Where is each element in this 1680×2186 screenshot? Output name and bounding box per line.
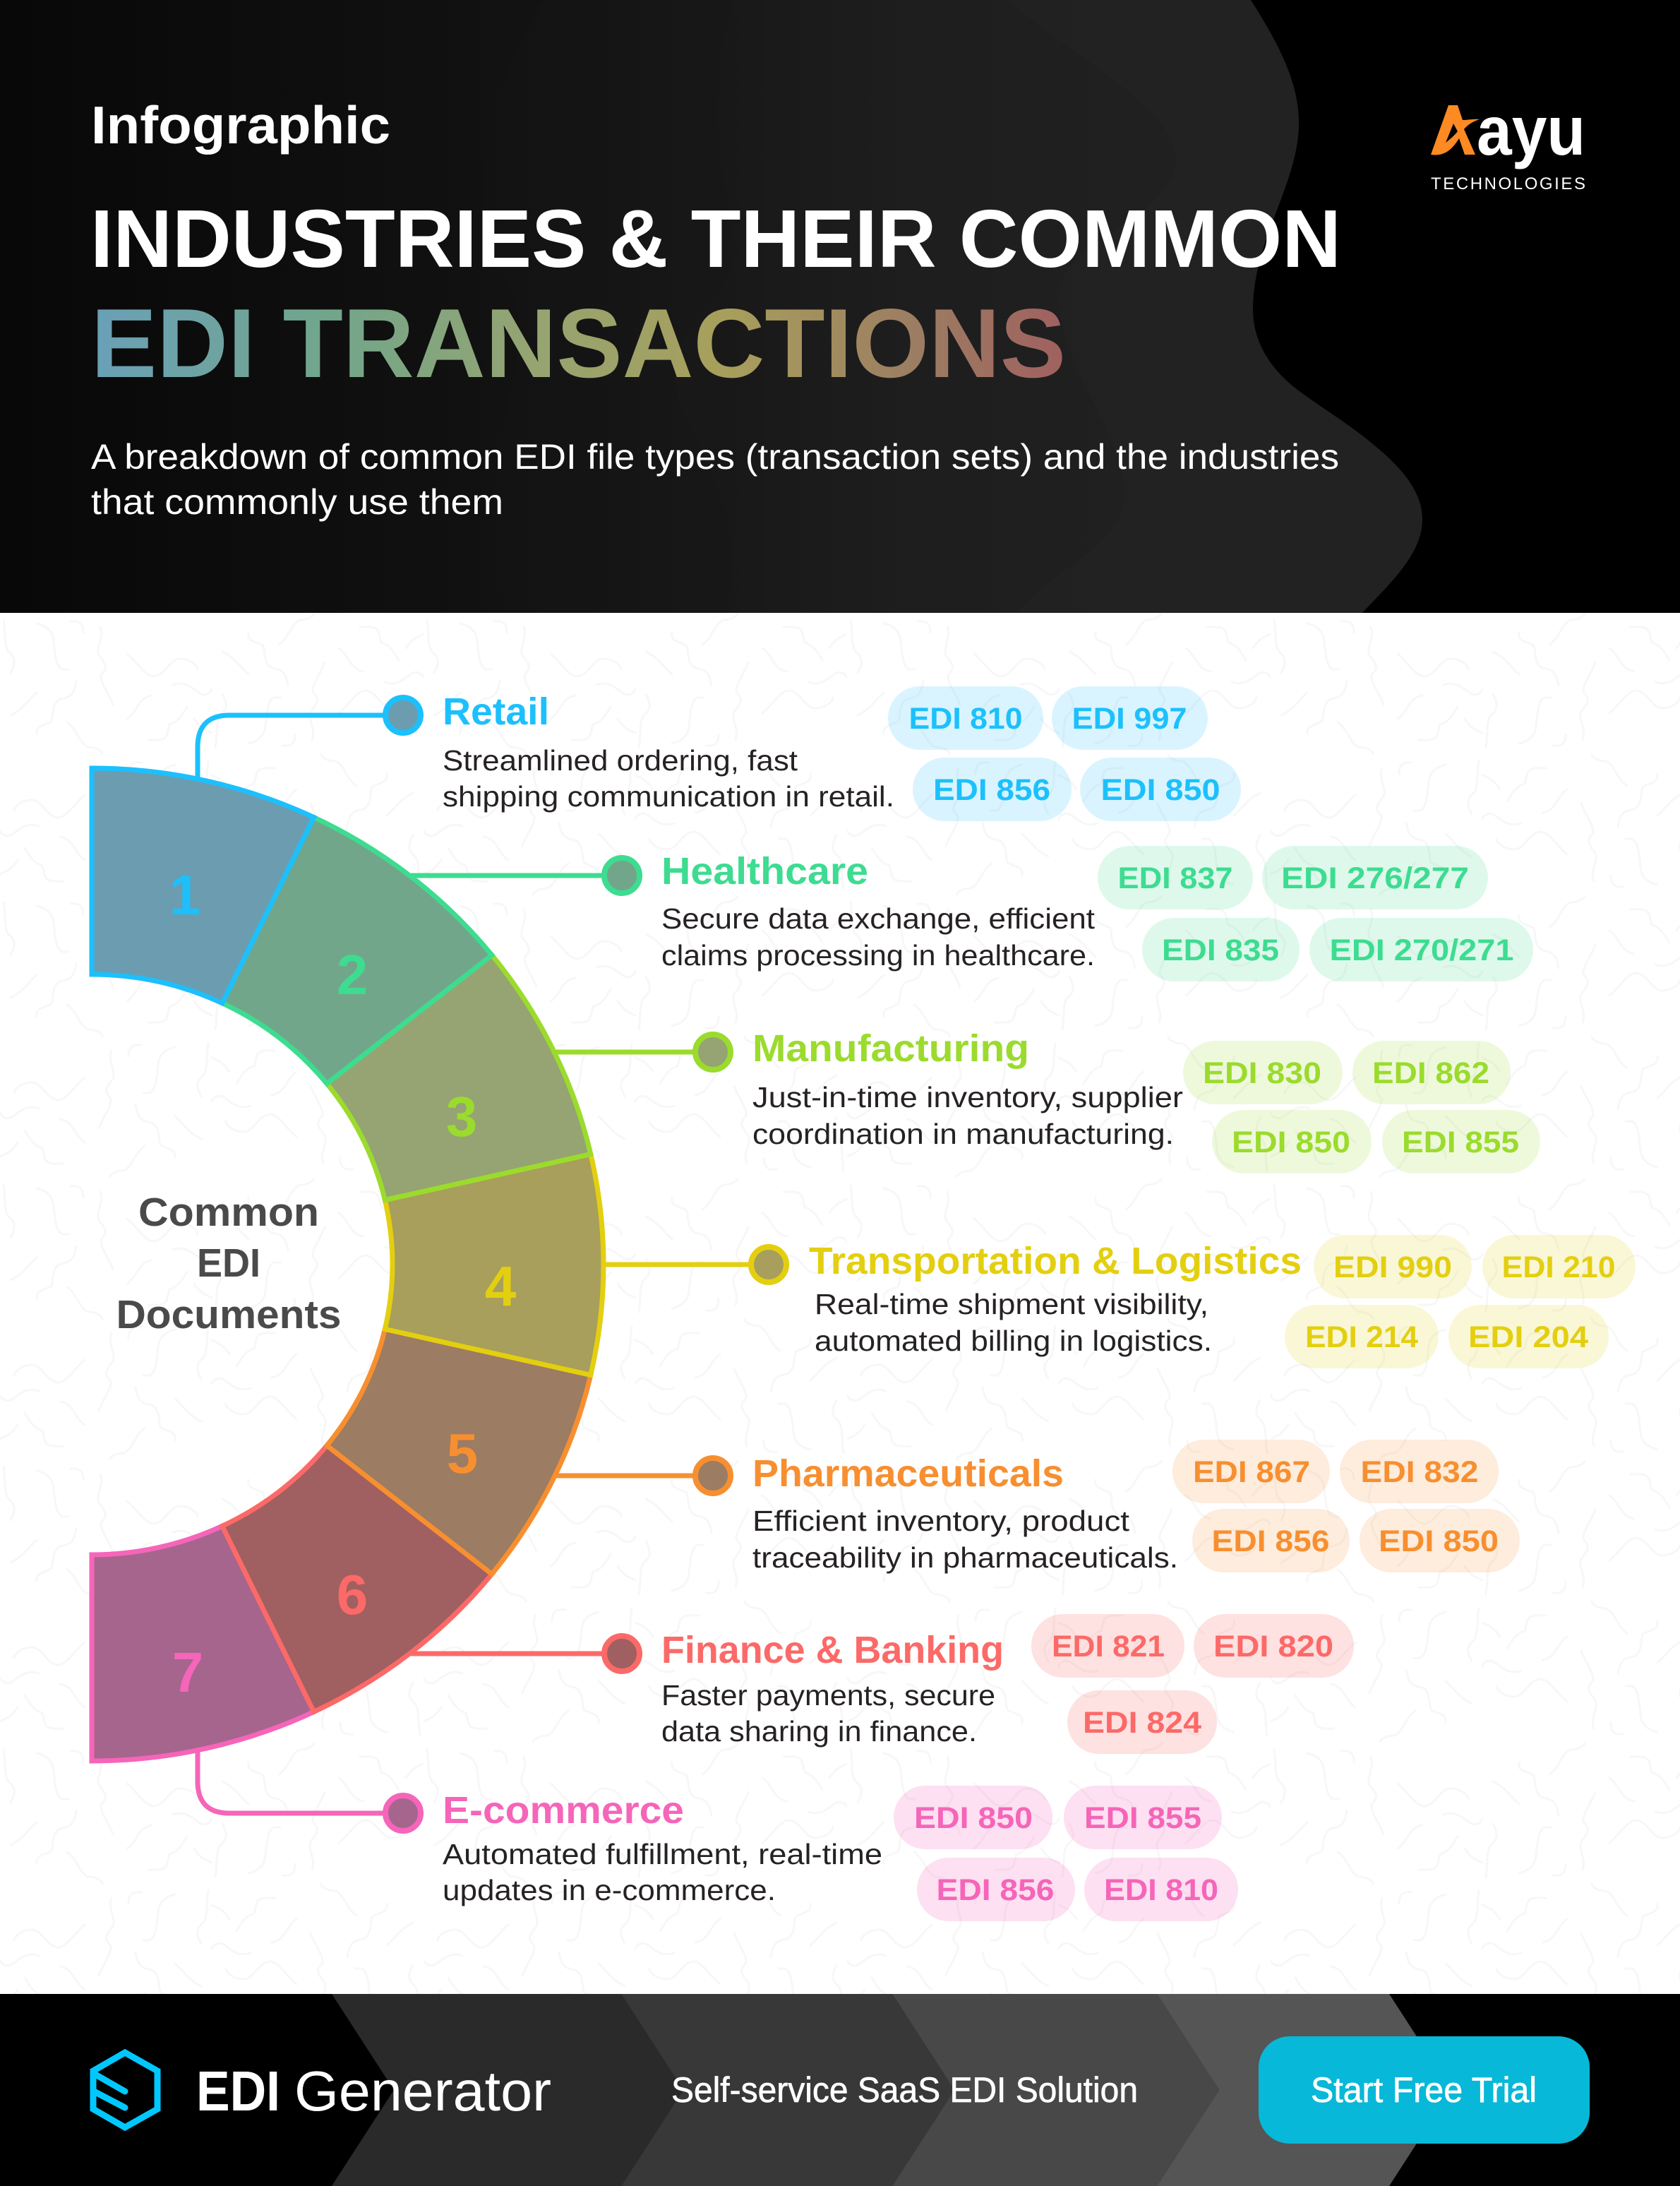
button: Start Free Trial: Start Free Trial [1311,2070,1537,2110]
heading: Manufacturing: Manufacturing [752,1027,1029,1070]
center label: Documents [116,1292,342,1337]
dot: Retail [385,698,421,733]
pills: Finance & Banking: EDI 824 [1083,1706,1201,1740]
pills: Pharmaceuticals: EDI 832 [1361,1455,1478,1489]
pills: Transportation & Logistics: EDI 214 [1305,1320,1418,1354]
button: Start Free Trial [1259,2036,1590,2144]
pills: Pharmaceuticals: EDI 856 [1211,1524,1330,1558]
heading: E-commerce: E-commerce [443,1789,684,1832]
row: E-commerce [385,1786,1238,1921]
segment numbers: 1 [169,864,200,926]
pills: Retail: EDI 997 [1072,702,1187,736]
description: Manufacturing [752,1081,1183,1150]
description: E-commerce [443,1838,882,1906]
segment numbers: 2 [337,943,368,1006]
pills: Transportation & Logistics: EDI 204 [1468,1320,1588,1354]
description: Healthcare [661,902,1096,972]
pills: Retail: EDI 850 [1101,773,1220,807]
pills: E-commerce [894,1786,1238,1921]
pills: Healthcare: EDI 837 [1118,861,1232,895]
pills: Finance & Banking [1031,1614,1354,1754]
footer band [0,1994,1680,2186]
tagline: Self-service SaaS EDI Solution [671,2070,1138,2110]
row: Healthcare [604,846,1533,981]
pills: Finance & Banking: EDI 820 [1213,1630,1333,1664]
segment 2 [222,818,492,1084]
description: Retail: shipping communication in retail. [443,780,894,813]
row: Finance & Banking [604,1614,1354,1754]
pills: Retail: EDI 810 [909,702,1022,736]
description: Healthcare: claims processing in healthcare. [661,939,1095,972]
description: Pharmaceuticals: traceability in pharmaceuticals. [752,1541,1178,1574]
row: Pharmaceuticals [695,1440,1520,1574]
description: Transportation & Logistics [815,1288,1212,1357]
brand: EDI Generator: Generator [294,2060,551,2122]
pills: Pharmaceuticals: EDI 850 [1379,1524,1499,1558]
pills: Transportation & Logistics: EDI 990 [1333,1250,1452,1284]
pills: Manufacturing: EDI 830 [1203,1056,1321,1090]
heading: Finance & Banking: Finance & Banking [661,1629,1004,1671]
dot: Manufacturing [695,1034,731,1070]
heading: Retail: Retail [443,691,549,733]
description: Finance & Banking: Faster payments, secure [661,1679,995,1712]
segment numbers: 7 [172,1641,203,1704]
segment numbers: 4 [485,1255,517,1318]
pills: Finance & Banking: EDI 821 [1052,1630,1165,1664]
description: E-commerce: Automated fulfillment, real-time [443,1838,882,1870]
pills: Manufacturing [1183,1041,1540,1173]
description: Retail: Streamlined ordering, fast [443,744,798,777]
center label: EDI [197,1241,260,1286]
segment numbers: 3 [446,1085,477,1148]
segment numbers: 6 [337,1563,368,1626]
center label: Common [138,1190,319,1235]
pills: Manufacturing: EDI 862 [1372,1056,1489,1090]
segment numbers: 5 [447,1422,478,1485]
connectors [198,715,769,1813]
dot: Finance & Banking [604,1636,640,1671]
pills: Manufacturing: EDI 850 [1232,1125,1350,1159]
pills: E-commerce: EDI 810 [1104,1873,1218,1907]
pills: E-commerce: EDI 850 [914,1801,1033,1835]
dot: Transportation & Logistics [751,1247,786,1282]
pills: Healthcare: EDI 276/277 [1281,861,1469,895]
pills: Retail [888,686,1241,821]
subtitle: that commonly use them [91,482,503,522]
description: Transportation & Logistics: automated billing in logistics. [815,1325,1212,1357]
segment 6 [222,1445,492,1712]
heading: Transportation & Logistics: Transportation & Logistics [809,1240,1302,1282]
description: Manufacturing: coordination in manufacturing. [752,1118,1174,1150]
center label [116,1190,342,1337]
subtitle: A breakdown of common EDI file types (transaction sets) and the industries [91,437,1339,477]
heading: Pharmaceuticals: Pharmaceuticals [752,1452,1064,1495]
row: Manufacturing [695,1027,1540,1173]
pills: E-commerce: EDI 856 [936,1873,1055,1907]
dot: Healthcare [604,858,640,893]
pills: Retail: EDI 856 [933,773,1050,807]
heading: Healthcare: Healthcare [661,850,868,892]
pills: Transportation & Logistics [1285,1235,1636,1368]
description: Transportation & Logistics: Real-time shipment visibility, [815,1288,1208,1320]
pills: Pharmaceuticals: EDI 867 [1193,1455,1310,1489]
description: Finance & Banking: data sharing in finance. [661,1715,977,1748]
segment 3 [327,955,591,1200]
patterned white background [0,613,1680,1994]
segment 1 [92,768,314,1003]
title line 1: INDUSTRIES & THEIR COMMON [90,193,1341,285]
description: E-commerce: updates in e-commerce. [443,1874,776,1906]
segment 5 [327,1329,591,1574]
dot: Pharmaceuticals [695,1458,731,1493]
brand: EDI Generator: EDI [196,2060,280,2122]
pills: Healthcare: EDI 835 [1162,933,1279,967]
pills: Pharmaceuticals [1172,1440,1520,1572]
description: Pharmaceuticals: Efficient inventory, product [752,1505,1130,1537]
pills: E-commerce: EDI 855 [1084,1801,1201,1835]
segment 4 [385,1154,604,1375]
pills: Transportation & Logistics: EDI 210 [1502,1250,1615,1284]
row: Retail [385,686,1241,821]
pills: Healthcare: EDI 270/271 [1330,933,1513,967]
description: Healthcare: Secure data exchange, efficient [661,902,1096,935]
description: Finance & Banking [661,1679,995,1748]
segment 7 [92,1526,314,1761]
row: Transportation & Logistics [751,1235,1636,1368]
description: Retail [443,744,894,813]
icon: EDI Generator hexagon [93,2053,157,2127]
logo: Aayu Technologies: TECHNOLOGIES [1431,174,1585,193]
title line 2 gradient: EDI TRANSACTIONS [91,289,1066,398]
semicircle ring chart [92,768,604,1761]
pills: Manufacturing: EDI 855 [1402,1125,1519,1159]
pills: Healthcare [1098,846,1533,981]
header band [0,0,1680,613]
segment numbers [169,864,517,1704]
subtitle [91,437,1339,522]
description: Pharmaceuticals [752,1505,1178,1574]
logo: Aayu Technologies [1431,92,1585,193]
dot: E-commerce [385,1796,421,1831]
logo: Aayu Technologies: ayu [1477,92,1585,169]
description: Manufacturing: Just-in-time inventory, supplier [752,1081,1183,1113]
eyebrow label: Infographic [91,95,390,155]
